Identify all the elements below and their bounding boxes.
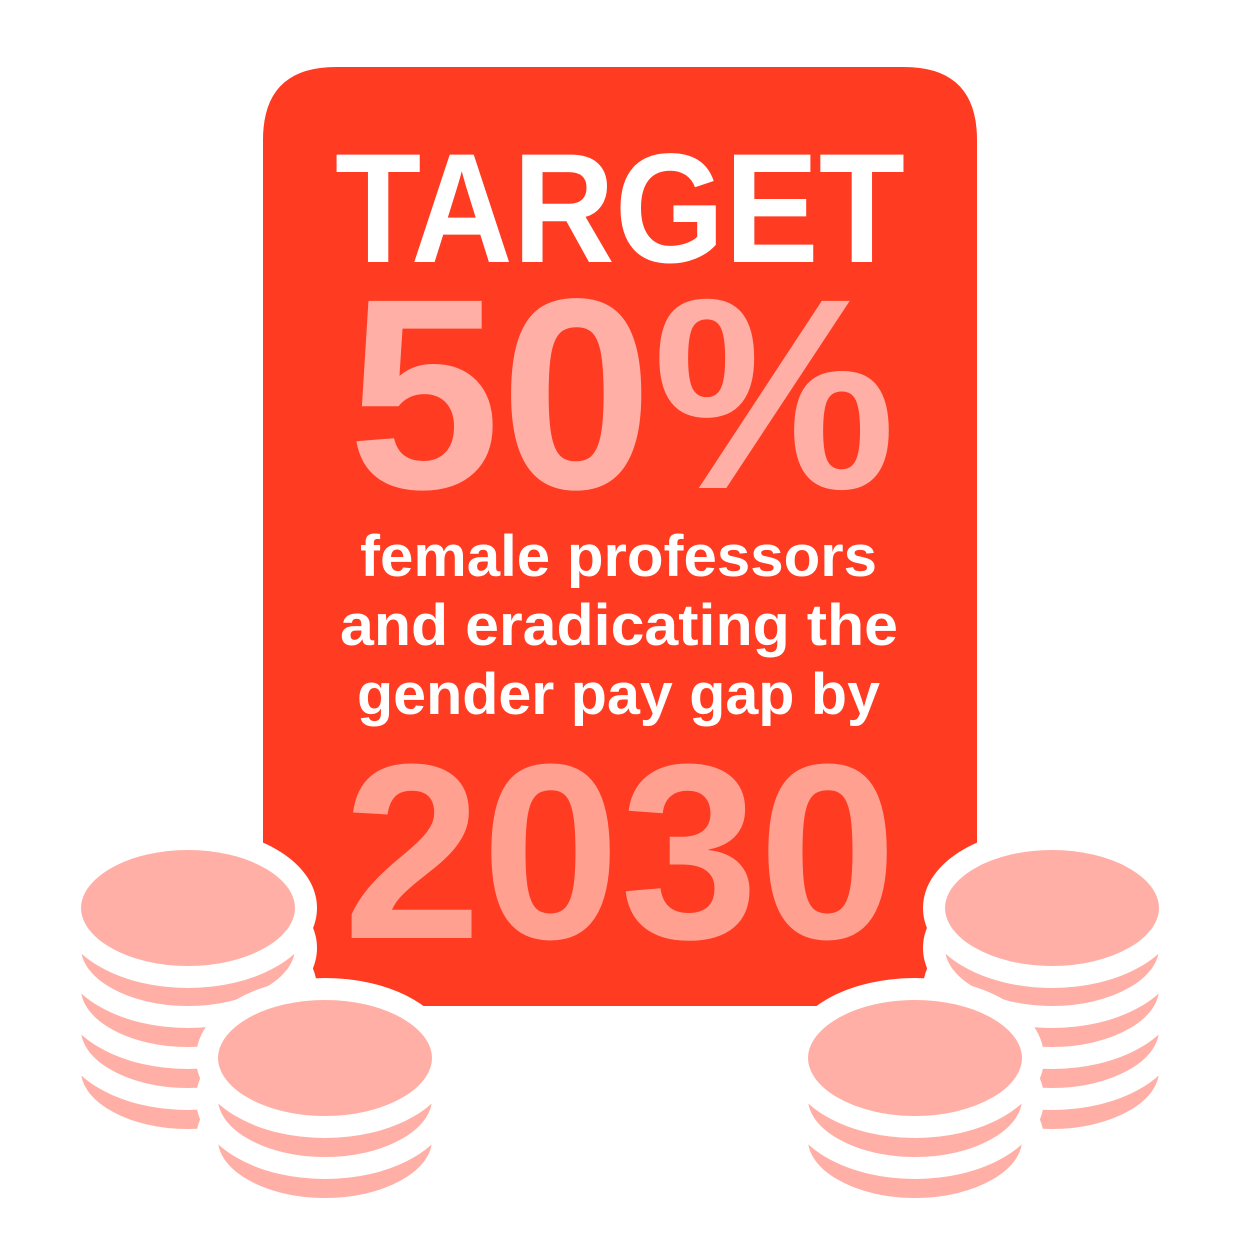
- text block: description: [340, 524, 898, 727]
- icon: right front coin stack: [797, 989, 1033, 1209]
- text block: description: female professors: [360, 524, 877, 589]
- heading: TARGET: TARGET: [335, 122, 905, 296]
- big number: 2030: 2030: [343, 712, 897, 991]
- icon: right back coin stack: [934, 839, 1170, 1140]
- text block: description: gender pay gap by: [357, 662, 880, 727]
- text block: description: and eradicating the: [340, 593, 898, 658]
- panel: red target card: [263, 67, 977, 1006]
- big number: 50%: 50%: [348, 242, 896, 546]
- icon: left front coin stack: [207, 989, 443, 1209]
- icon: left back coin stack: [70, 839, 306, 1140]
